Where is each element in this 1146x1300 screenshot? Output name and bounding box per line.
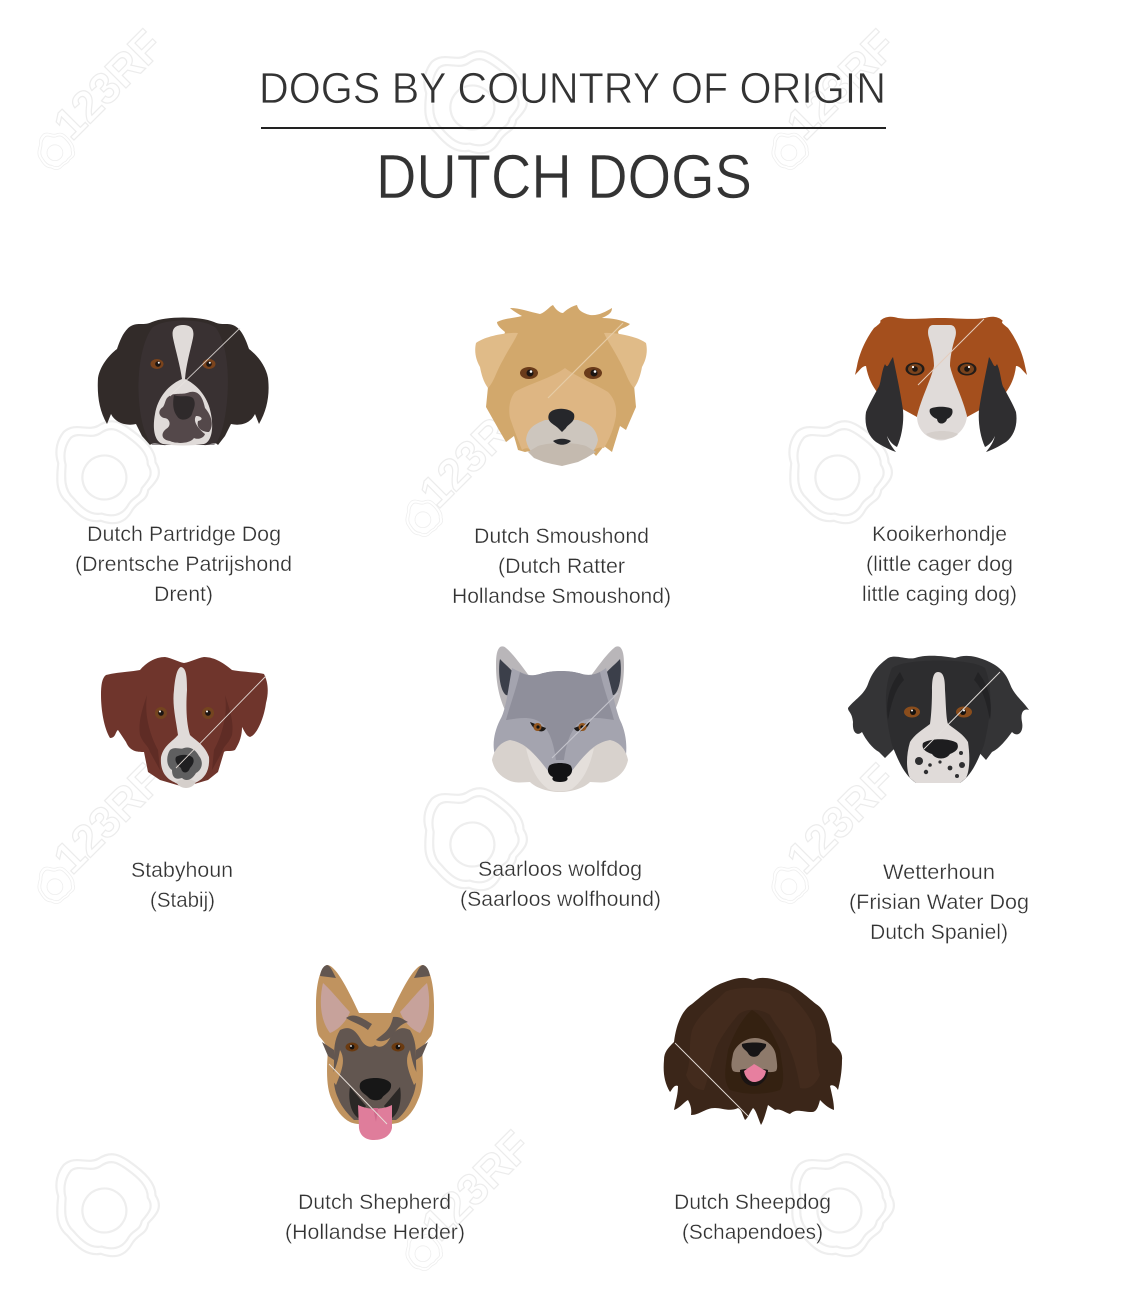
- eyes: [904, 706, 972, 718]
- dog icon: Dutch Smoushond: [475, 305, 647, 466]
- heading: dutch dogs: DUTCH DOGS: [376, 143, 752, 212]
- label: Kooikerhondje: [862, 523, 1017, 606]
- eyes: [530, 722, 590, 731]
- spots: [915, 751, 965, 778]
- label: Dutch Smoushond: (Dutch Ratter: [498, 555, 625, 578]
- eyes: [150, 359, 216, 369]
- label: Kooikerhondje: Kooikerhondje: [872, 523, 1007, 546]
- dog icon: Dutch Shepherd: [316, 965, 434, 1140]
- dog icon: Dutch Sheepdog: [664, 978, 842, 1125]
- text: 123RF: [777, 21, 905, 149]
- label: Wetterhoun: [849, 861, 1029, 944]
- label: Stabyhoun: [131, 859, 233, 912]
- label: Dutch Shepherd: Dutch Shepherd: [298, 1191, 451, 1214]
- dog icon: Wetterhoun: [848, 656, 1029, 783]
- text: 123RF: [44, 21, 172, 149]
- eyes: [520, 367, 602, 379]
- text: 123RF: [412, 1122, 540, 1250]
- title: dogs by country of origin: DOGS BY COUNTRY OF ORIGIN: [259, 64, 886, 113]
- label: Dutch Partridge Dog: [75, 523, 292, 606]
- label: Stabyhoun: Stabyhoun: [131, 859, 233, 882]
- label: Stabyhoun: (Stabij): [150, 889, 215, 912]
- eyes: [906, 362, 976, 376]
- label: Dutch Partridge Dog: Dutch Partridge Dog: [87, 523, 281, 546]
- text: 123RF: [777, 755, 905, 883]
- label: Saarloos wolfdog: Saarloos wolfdog: [478, 858, 642, 881]
- dog icon: Dutch Partridge Dog: [98, 318, 269, 446]
- label: Dutch Smoushond: [452, 525, 671, 608]
- label: Wetterhoun: Wetterhoun: [883, 861, 995, 884]
- label: Wetterhoun: Dutch Spaniel): [870, 921, 1008, 944]
- label: Wetterhoun: (Frisian Water Dog: [849, 891, 1029, 914]
- label: Dutch Partridge Dog: (Drentsche Patrijshond: [75, 553, 292, 576]
- dog icon: Saarloos wolfdog: [492, 646, 628, 792]
- label: Dutch Shepherd: (Hollandse Herder): [285, 1221, 465, 1244]
- text: 123RF: [44, 755, 172, 883]
- label: Kooikerhondje: (little cager dog: [866, 553, 1013, 576]
- eyes: [346, 1042, 404, 1052]
- label: Saarloos wolfdog: (Saarloos wolfhound): [460, 888, 661, 911]
- label: Dutch Sheepdog: Dutch Sheepdog: [674, 1191, 831, 1214]
- label: Dutch Sheepdog: (Schapendoes): [682, 1221, 823, 1244]
- label: Dutch Smoushond: Dutch Smoushond: [474, 525, 649, 548]
- label: Dutch Shepherd: [285, 1191, 465, 1244]
- label: Saarloos wolfdog: [460, 858, 661, 911]
- eyes: [155, 707, 214, 719]
- label: Dutch Sheepdog: [674, 1191, 831, 1244]
- label: Dutch Partridge Dog: Drent): [154, 583, 213, 606]
- dog icon: Stabyhoun: [101, 657, 268, 788]
- dog icon: Kooikerhondje: [855, 317, 1027, 452]
- label: Kooikerhondje: little caging dog): [862, 583, 1017, 606]
- label: Dutch Smoushond: Hollandse Smoushond): [452, 585, 671, 608]
- text: 123RF: [410, 389, 538, 517]
